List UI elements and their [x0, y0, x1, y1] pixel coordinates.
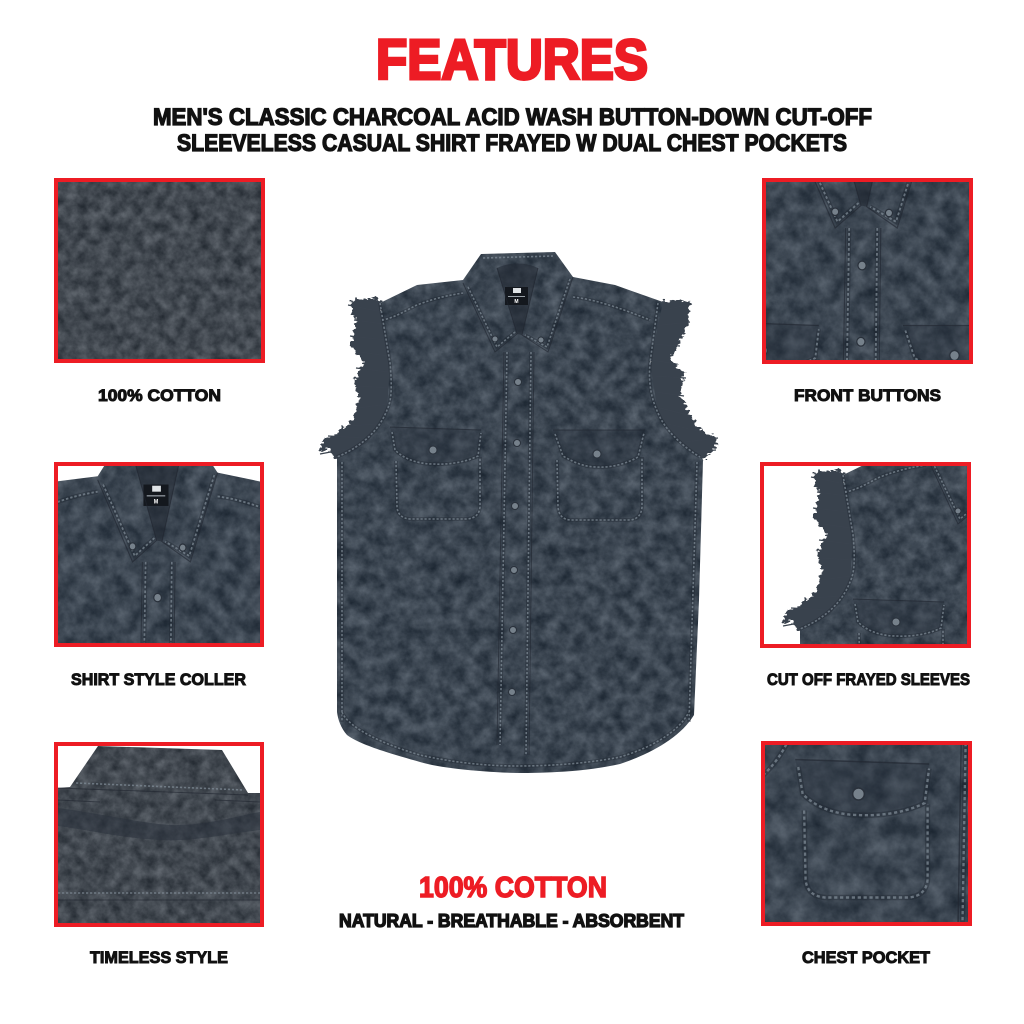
panel: chest pocket — [761, 741, 972, 967]
panel: timeless style — [54, 742, 264, 967]
neck opening and size tag: M — [514, 299, 519, 305]
right frayed armhole — [648, 300, 718, 462]
panel label: CHEST POCKET — [802, 948, 931, 967]
panel label: FRONT BUTTONS — [794, 386, 941, 405]
left armhole seam — [337, 303, 391, 457]
panel: cut off frayed sleeves — [760, 462, 971, 689]
panel: 100% cotton — [54, 178, 265, 405]
subtitle — [153, 104, 872, 157]
right yoke seam — [573, 297, 650, 320]
shirt body — [337, 252, 703, 773]
panel label: SHIRT STYLE COLLER — [71, 670, 246, 689]
collar close-up — [54, 462, 264, 647]
left yoke seam — [382, 293, 463, 320]
fabric swatch — [54, 178, 265, 363]
neck opening and size tag — [483, 256, 553, 335]
side seams — [342, 462, 697, 722]
left chest pocket — [390, 427, 481, 519]
panel label: 100% COTTON — [98, 386, 221, 405]
right collar leaf — [522, 268, 573, 352]
hem stitching — [342, 712, 689, 766]
right armhole seam — [649, 303, 700, 457]
placket close-up — [762, 178, 973, 364]
left frayed armhole — [320, 298, 392, 460]
placket upper — [500, 352, 534, 560]
panel: shirt style collar — [54, 462, 264, 689]
subtitle: MEN'S CLASSIC CHARCOAL ACID WASH BUTTON-DOWN CUT-OFF — [153, 104, 872, 131]
title: FEATURES — [376, 28, 648, 92]
left collar leaf — [463, 268, 517, 352]
right chest pocket — [553, 430, 645, 520]
back collar and yoke close-up — [54, 742, 264, 927]
pocket close-up — [761, 741, 972, 926]
panel label: TIMELESS STYLE — [90, 948, 228, 967]
main shirt image — [320, 252, 718, 773]
cotton callout text: NATURAL - BREATHABLE - ABSORBENT — [339, 911, 684, 931]
placket lower — [497, 560, 531, 755]
panel: front buttons — [762, 178, 973, 405]
cotton callout heading: 100% COTTON — [419, 872, 607, 904]
sleeve close-up — [760, 462, 971, 648]
subtitle: SLEEVELESS CASUAL SHIRT FRAYED W DUAL CHEST POCKETS — [177, 130, 847, 157]
